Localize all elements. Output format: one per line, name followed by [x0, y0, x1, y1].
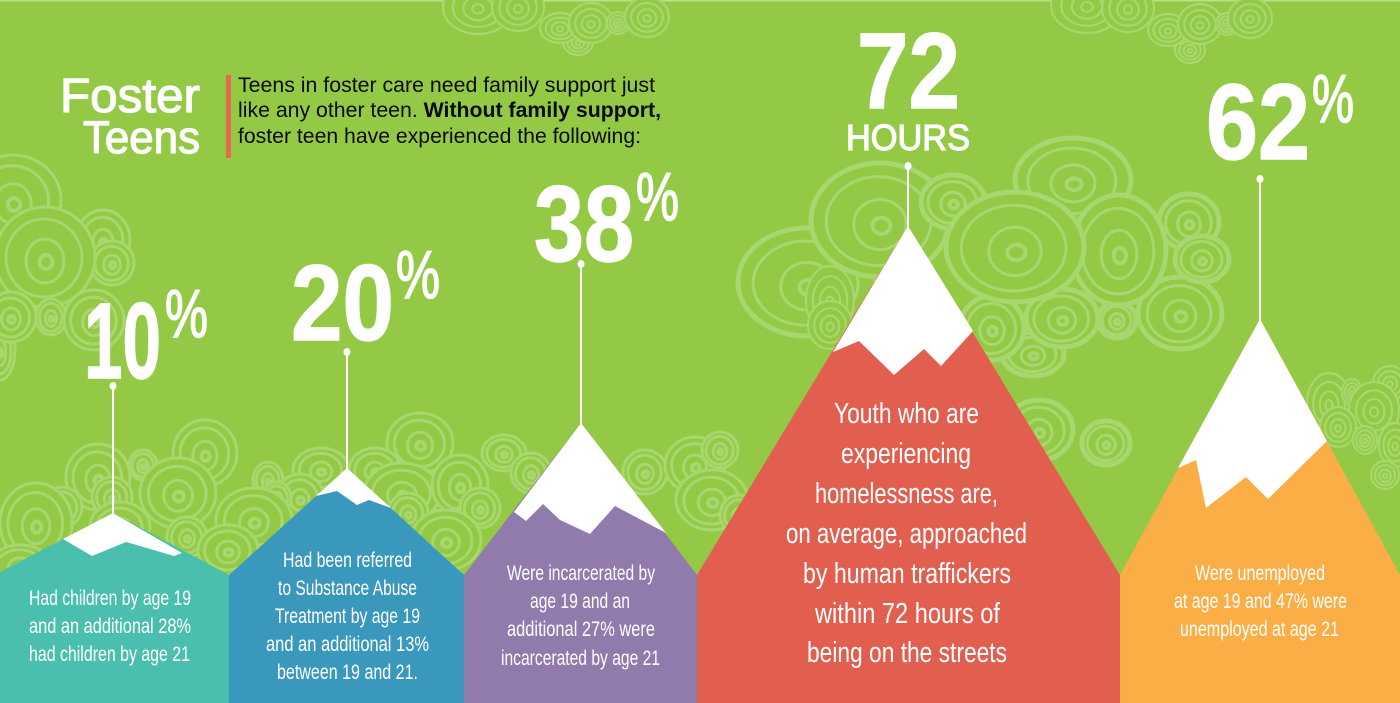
description: incarcerated by age 21	[501, 646, 660, 670]
description: had children by age 21	[29, 642, 190, 666]
mountain: red	[697, 226, 1120, 703]
description: Youth who are	[834, 398, 979, 430]
snow cap	[1178, 319, 1327, 508]
panel: 10% had children	[0, 276, 229, 703]
description: Were incarcerated by	[507, 561, 655, 585]
panel: 20% substance abuse treatment	[229, 237, 464, 703]
description	[786, 398, 1027, 669]
panel: 72 hours trafficking	[697, 10, 1120, 703]
intro text: foster teen have experienced the following:	[238, 124, 641, 148]
description: within 72 hours of	[814, 598, 1001, 630]
stat: 20%: %	[396, 237, 440, 313]
stat: 62%: 62	[1206, 61, 1310, 182]
pin line	[904, 162, 912, 227]
stat: 38%: %	[636, 159, 679, 235]
stat: 20%: 20	[291, 242, 394, 363]
intro text: like any other teen. Without family support,	[238, 98, 661, 122]
mountain: orange	[1120, 319, 1400, 703]
panel: 62% unemployed	[1120, 61, 1400, 703]
mountain: blue	[229, 468, 464, 703]
stat: 10%: %	[165, 276, 208, 352]
description	[266, 548, 429, 684]
description	[29, 586, 191, 666]
description: homelessness are,	[815, 478, 998, 510]
mountain: teal	[0, 513, 229, 703]
stat: 38%: 38	[534, 163, 634, 284]
description: unemployed at age 21	[1180, 617, 1339, 641]
divider bar	[226, 75, 231, 158]
pin line	[344, 348, 350, 469]
description: and an additional 13%	[266, 632, 429, 656]
title	[60, 70, 200, 163]
stat: 72 hours: 72	[857, 10, 960, 131]
description: Had been referred	[283, 548, 412, 572]
intro text	[238, 73, 661, 148]
description: and an additional 28%	[29, 614, 191, 638]
description: Treatment by age 19	[275, 604, 420, 628]
snow cap	[63, 513, 182, 556]
pin line	[110, 382, 116, 514]
description: Had children by age 19	[29, 586, 191, 610]
stat: 62%: %	[1312, 61, 1354, 137]
stat: 72 hours: HOURS	[846, 117, 970, 158]
snow cap	[316, 468, 391, 508]
description	[1174, 561, 1347, 641]
description: age 19 and an	[530, 589, 630, 613]
description: by human traffickers	[803, 558, 1011, 590]
title: Foster	[60, 70, 200, 123]
description: being on the streets	[807, 637, 1007, 669]
pin line	[1256, 175, 1264, 320]
intro text: Teens in foster care need family support just	[238, 73, 655, 97]
stat: 10%: 10	[84, 280, 161, 401]
description: between 19 and 21.	[277, 660, 418, 684]
mountain: purple	[464, 423, 697, 703]
pin line	[578, 260, 584, 424]
description: to Substance Abuse	[278, 576, 417, 600]
snow cap	[514, 423, 666, 534]
description	[501, 561, 660, 670]
title: Teens	[83, 112, 200, 163]
description: Were unemployed	[1195, 561, 1325, 585]
description: experiencing	[841, 438, 971, 470]
description: additional 27% were	[507, 617, 655, 641]
description: on average, approached	[786, 518, 1027, 550]
panel: 38% incarcerated	[464, 159, 697, 703]
snow cap	[833, 226, 973, 375]
